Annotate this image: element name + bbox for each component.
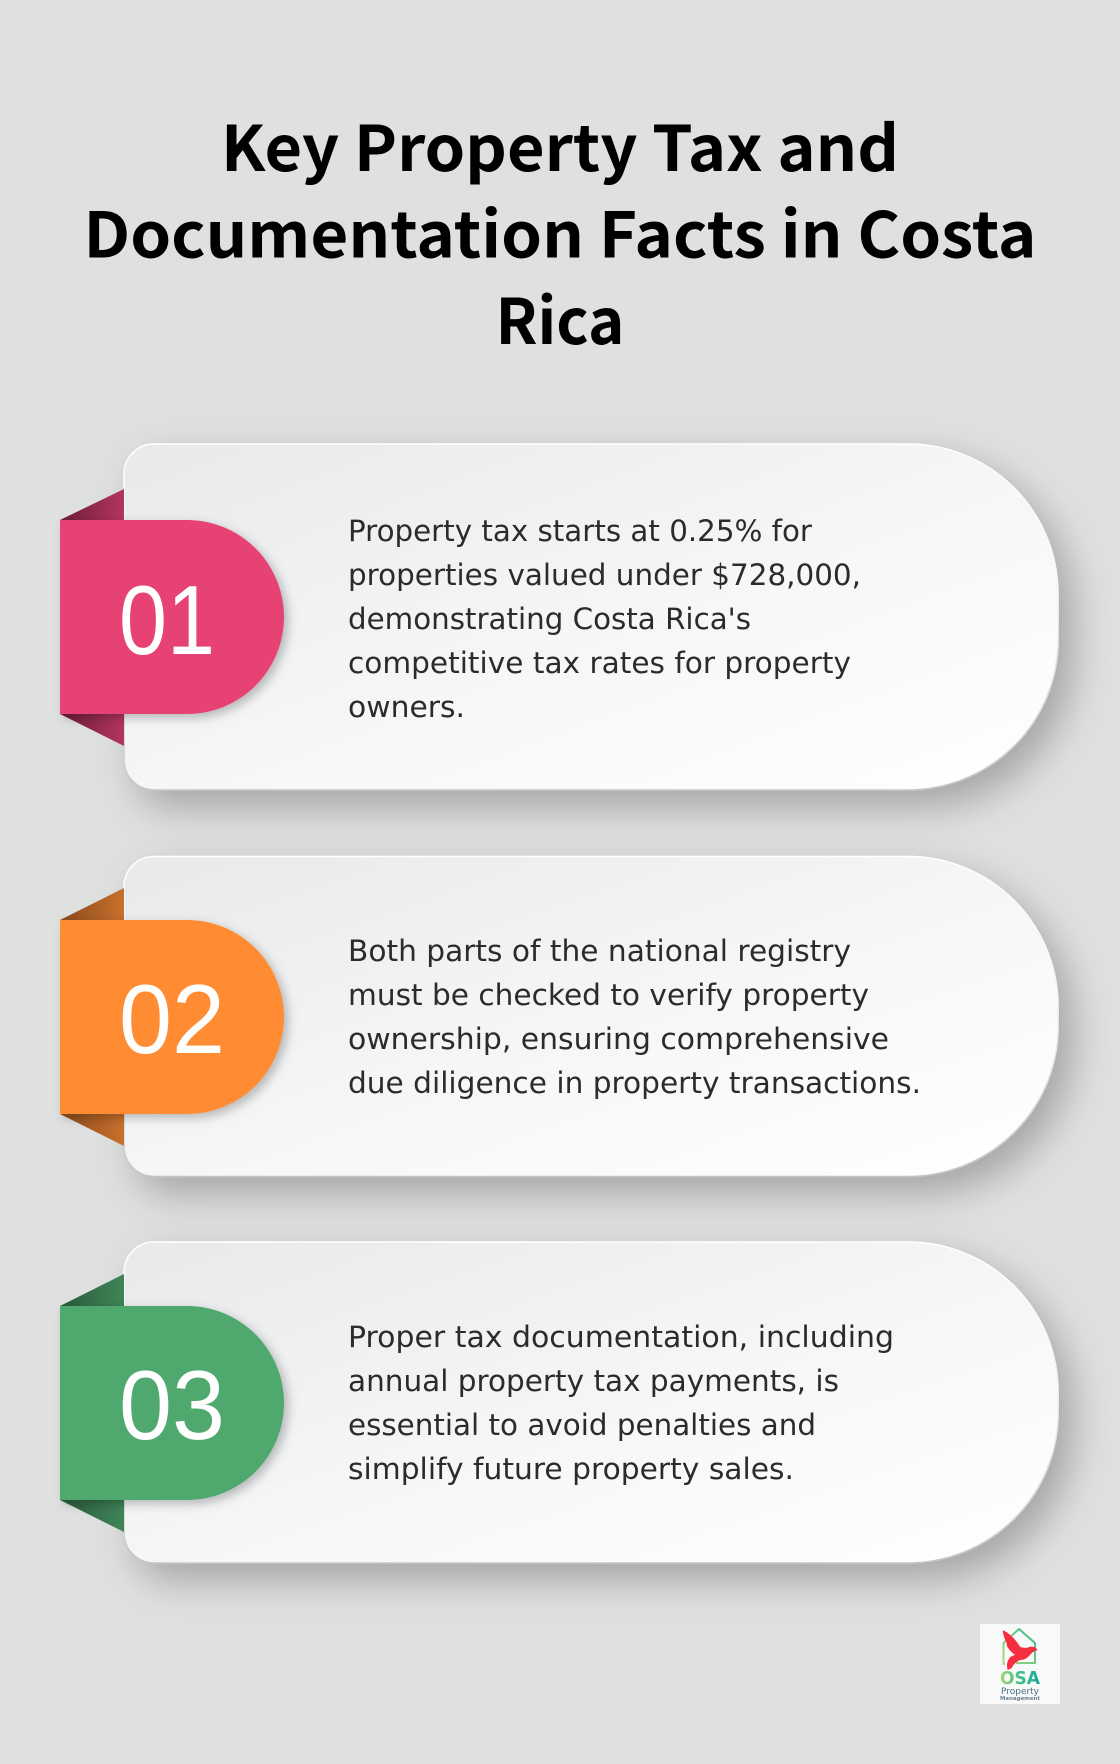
text: fact 01: owners. — [348, 690, 465, 724]
card background 02 — [124, 856, 1058, 1176]
title — [84, 99, 1036, 363]
icon: red bird — [1003, 1630, 1038, 1670]
ribbon fold top 02 — [60, 888, 124, 920]
logo small text: Management — [1000, 1696, 1040, 1702]
number badge 01 — [60, 520, 284, 714]
ribbon fold bottom 02 — [60, 1114, 124, 1146]
ribbon fold bottom 01 — [60, 714, 124, 746]
number badge 02 — [60, 920, 284, 1114]
text: fact 01: competitive tax rates for property — [348, 646, 851, 680]
number 01: 01 — [119, 565, 215, 675]
number 02: 02 — [119, 964, 225, 1074]
text: fact 01 — [348, 514, 861, 724]
text: fact 03: simplify future property sales. — [348, 1452, 794, 1486]
ribbon fold top 03 — [60, 1274, 124, 1306]
title: Key Property Tax and — [221, 99, 899, 190]
icon: house outline — [1004, 1629, 1035, 1664]
text: fact 02: ownership, ensuring comprehensive — [348, 1022, 889, 1056]
ribbon fold top 01 — [60, 489, 124, 520]
text: fact 02: Both parts of the national registry — [348, 934, 851, 968]
panel: fact 01 — [60, 444, 1058, 790]
number 03: 03 — [119, 1350, 225, 1460]
card background 03 — [124, 1242, 1058, 1563]
panel: fact 03 — [60, 1242, 1058, 1563]
text: fact 03: annual property tax payments, is — [348, 1364, 839, 1398]
text: fact 01: demonstrating Costa Rica's — [348, 602, 751, 636]
card background 01 — [124, 444, 1058, 790]
text: fact 02: due diligence in property transactions. — [348, 1066, 921, 1100]
text: fact 01: Property tax starts at 0.25% for — [348, 514, 813, 548]
text: fact 03: essential to avoid penalties and — [348, 1408, 816, 1442]
text: fact 01: properties valued under $728,000, — [348, 558, 861, 592]
logo wordmark: OSA — [1000, 1668, 1040, 1689]
title: Rica — [496, 272, 624, 363]
text: fact 03: Proper tax documentation, including — [348, 1320, 894, 1354]
ribbon fold bottom 03 — [60, 1500, 124, 1532]
title: Documentation Facts in Costa — [84, 186, 1036, 276]
number badge 03 — [60, 1306, 284, 1500]
panel: fact 02 — [60, 856, 1058, 1176]
logo: OSA Property Management — [980, 1624, 1060, 1704]
logo subtitle: Property — [1001, 1687, 1039, 1697]
text: fact 02: must be checked to verify property — [348, 978, 869, 1012]
text: fact 02 — [348, 934, 921, 1100]
text: fact 03 — [348, 1320, 894, 1486]
